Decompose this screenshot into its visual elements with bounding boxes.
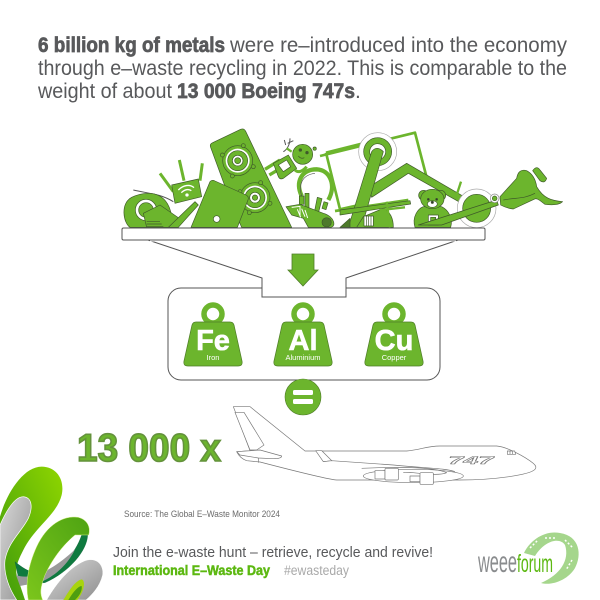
source: Source: The Global E–Waste Monitor 2024 <box>124 509 280 519</box>
logo: weeeforum: weee <box>477 546 517 579</box>
tray <box>122 228 485 240</box>
icon: down arrow <box>288 254 318 286</box>
icon: equals <box>285 379 321 415</box>
icon: drill <box>286 204 334 227</box>
icon: wheel and arm <box>418 182 499 228</box>
funnel body <box>148 240 458 297</box>
icon: roof frame <box>368 163 465 203</box>
weight: copper: Cu <box>375 325 413 357</box>
headline: weight of about <box>37 80 172 103</box>
headline: . <box>355 80 361 103</box>
hashtag: #ewasteday <box>284 563 349 578</box>
weight: iron <box>184 305 242 366</box>
icon: speaker <box>210 129 292 227</box>
weight: iron: Iron <box>207 353 219 362</box>
slogan: Join the e-waste hunt – retrieve, recycle and revive! <box>113 544 433 561</box>
funnel <box>122 228 485 380</box>
icon: monitor <box>320 133 427 211</box>
icon: Boeing 747 <box>233 407 536 484</box>
icon: e-waste day swirl <box>0 467 103 600</box>
logo: weeeforum: forum <box>517 550 553 578</box>
icon: headphones <box>299 169 332 212</box>
icon: teddy bear <box>414 189 451 227</box>
weight: copper <box>365 305 423 366</box>
headline: 6 billion kg of metals <box>38 34 225 57</box>
e-waste pile <box>124 129 563 228</box>
icon: monitor outline <box>326 143 363 209</box>
icon: pulley arm <box>348 133 397 227</box>
event name: International E–Waste Day <box>113 563 270 578</box>
weight: aluminium <box>274 305 332 366</box>
icon: wifi router <box>160 160 202 203</box>
right devices: monitor, pulley, roof, bear, wheel, nozzle <box>320 133 563 228</box>
weight: aluminium: Aluminium <box>285 353 321 362</box>
headline: through e–waste recycling in 2022. This is comparable to the <box>38 57 567 80</box>
headline <box>37 34 567 103</box>
headline: were re–introduced into the economy <box>229 34 567 57</box>
icon: tape roll <box>124 193 198 227</box>
metals box <box>168 288 440 380</box>
multiplier: 13 000 x: 13 000 x <box>77 427 221 470</box>
icon: cable <box>133 190 173 202</box>
icon: tablet <box>191 180 248 227</box>
icon: Boeing 747: 747 <box>448 455 496 467</box>
left devices: tape roll, router, tablet, speaker, robot, headphones, drill <box>124 129 363 227</box>
logo: weeeforum <box>477 532 579 584</box>
icon: robot <box>265 138 316 179</box>
weight: aluminium: Al <box>288 325 318 357</box>
icon: circuit board <box>340 201 411 227</box>
icon: vacuum nozzle <box>500 168 563 209</box>
weight: copper: Copper <box>382 353 407 362</box>
headline: 13 000 Boeing 747s <box>177 80 355 103</box>
weight: iron: Fe <box>196 325 230 357</box>
